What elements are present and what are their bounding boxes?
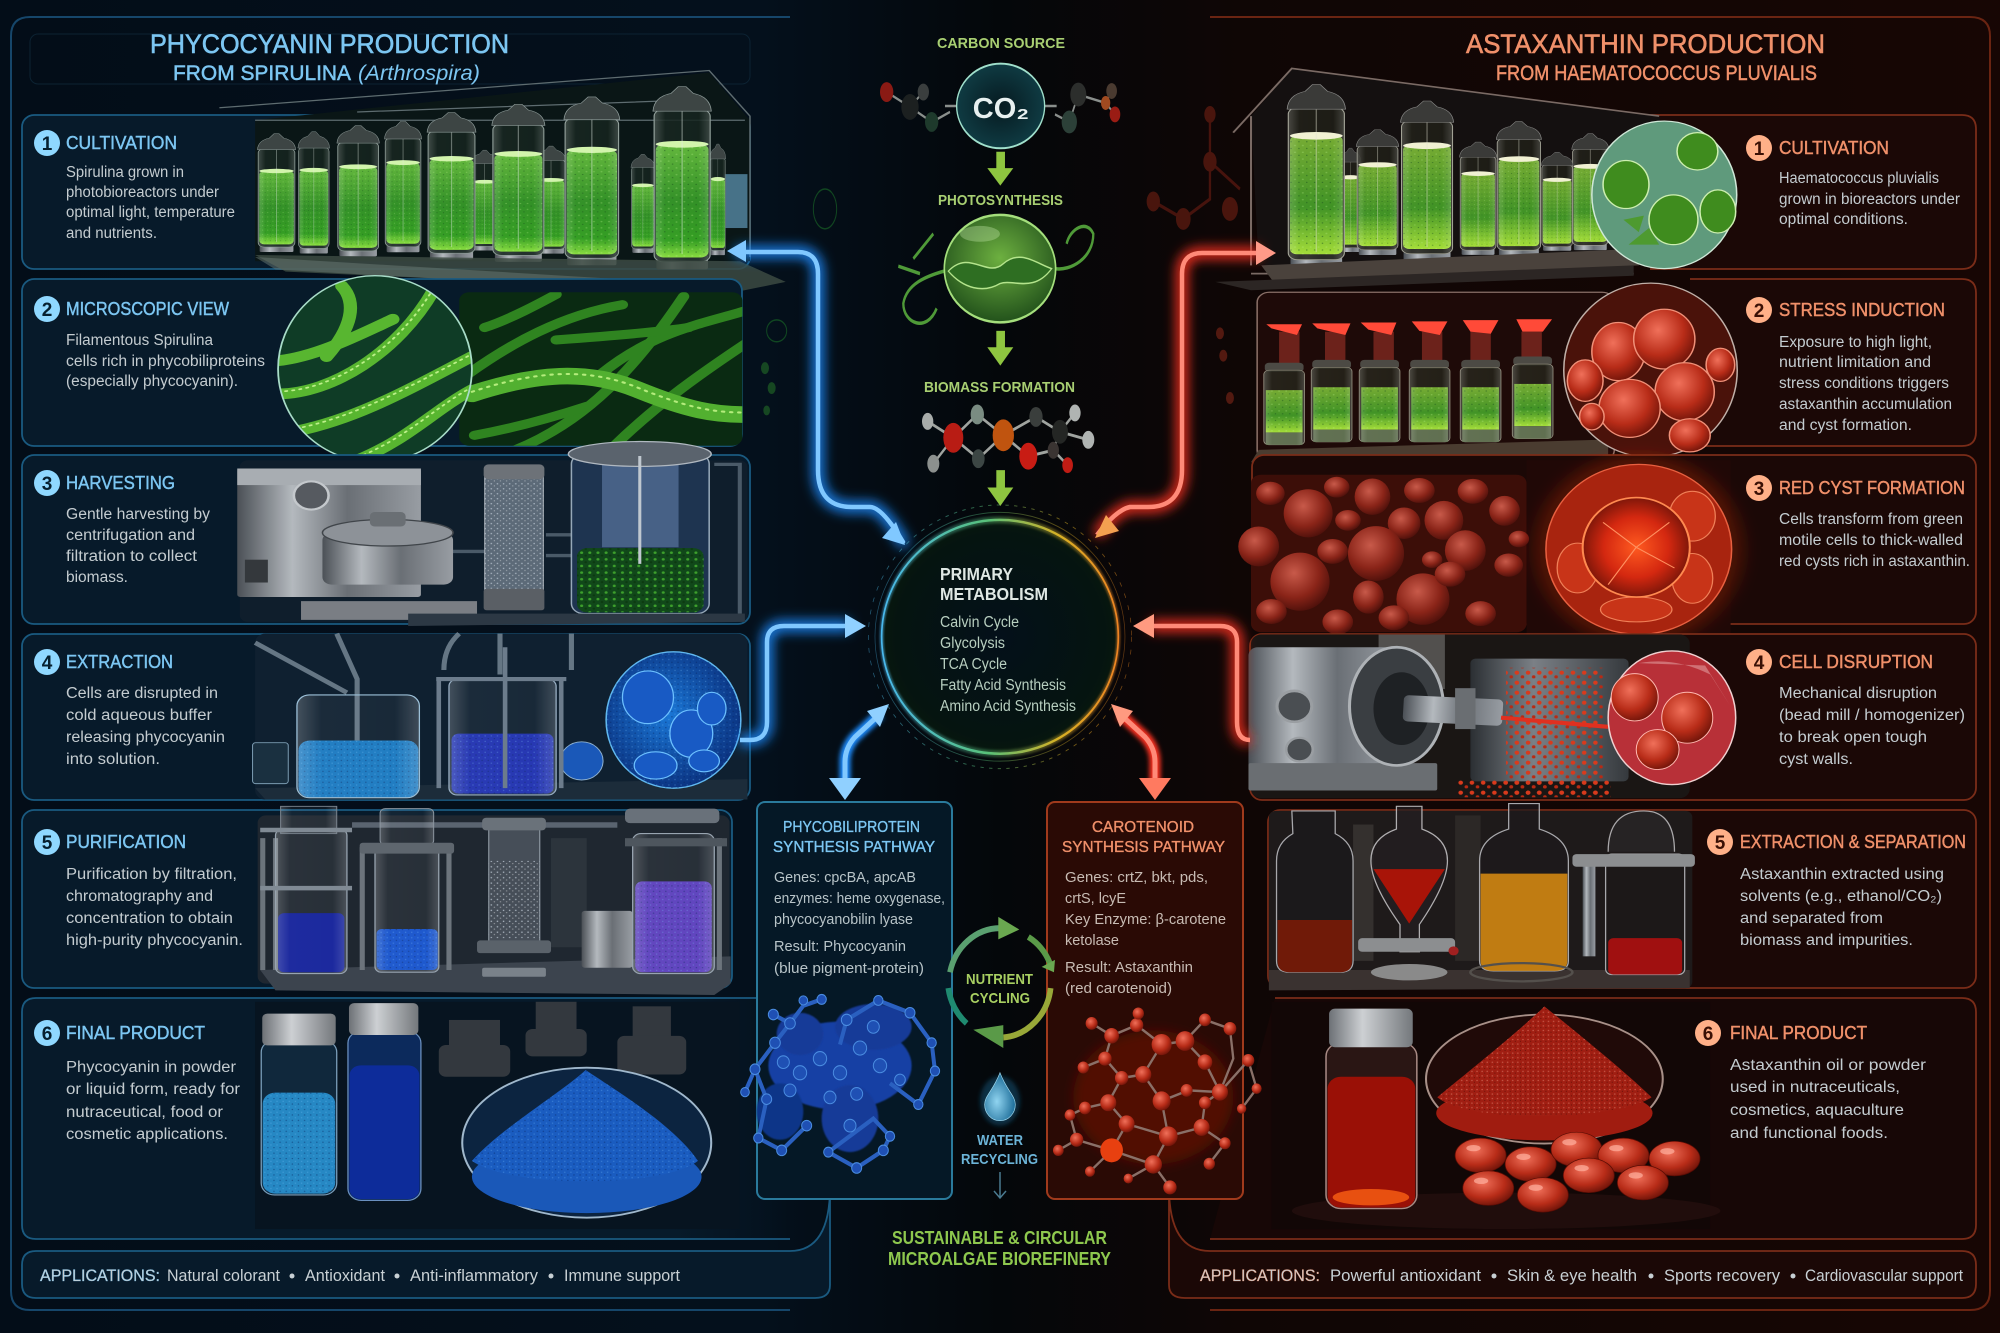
step body: Cells transform from green — [1779, 511, 1963, 528]
panel: phycocyanin applications: Antioxidant — [305, 1267, 385, 1285]
list: metabolism items — [940, 614, 1076, 715]
heading: phycocyanin title: PHYCOCYANIN PRODUCTION — [150, 29, 509, 59]
step body: Cells are disrupted in — [66, 685, 218, 702]
panel: phycocyanin applications: Anti-inflammatory — [410, 1267, 539, 1285]
panel: astaxanthin step 3 red cyst formation — [1238, 454, 1976, 645]
heading: phycocyanin title: (Arthrospira) — [358, 62, 480, 85]
step body — [66, 685, 225, 768]
step body — [1779, 334, 1952, 434]
arrow: water recycling down — [994, 1172, 1006, 1198]
step body: concentration to obtain — [66, 910, 233, 927]
body — [774, 870, 945, 977]
heading: astaxanthin title: FROM HAEMATOCOCCUS PLUVIALIS — [1496, 62, 1817, 85]
panel: astaxanthin applications: APPLICATIONS: — [1200, 1267, 1320, 1285]
step body: optimal conditions. — [1779, 211, 1908, 228]
list: metabolism items: TCA Cycle — [940, 656, 1007, 673]
image: vials and powder dish — [255, 1002, 740, 1229]
step body: Astaxanthin oil or powder — [1730, 1057, 1926, 1074]
step heading: EXTRACTION — [66, 652, 173, 672]
panel: astaxanthin step 4 cell disruption — [1248, 634, 1976, 800]
step badge 1 — [1746, 135, 1772, 161]
step body: nutraceutical, food or — [66, 1104, 223, 1121]
text: nutrient cycling — [966, 971, 1033, 1007]
step heading: FINAL PRODUCT — [1730, 1023, 1867, 1043]
step badge 3 — [34, 470, 60, 496]
image: spirulina filaments — [278, 276, 745, 462]
heading: phycocyanin title — [150, 29, 509, 85]
panel: phycocyanin step 5 purification — [22, 806, 732, 995]
step body: red cysts rich in astaxanthin. — [1779, 553, 1970, 570]
panel: astaxanthin applications: Skin & eye health — [1507, 1267, 1637, 1285]
step body: Filamentous Spirulina — [66, 332, 213, 349]
step body — [66, 1059, 240, 1143]
arrow: red pipe to cell disruption — [1133, 614, 1250, 740]
step body — [1779, 170, 1960, 228]
step body: into solution. — [66, 751, 160, 768]
step body: motile cells to thick-walled — [1779, 532, 1963, 549]
panel: phycocyanin step 6 final product — [22, 998, 790, 1239]
step body — [1730, 1057, 1926, 1142]
step heading: STRESS INDUCTION — [1779, 300, 1945, 320]
step badge 2 — [1746, 297, 1772, 323]
heading: phycocyanin title: FROM SPIRULINA — [173, 62, 351, 85]
image: beakers and cell sphere — [253, 634, 747, 800]
step body: Haematococcus pluvialis — [1779, 170, 1939, 187]
icon: red carotenoid molecule — [1053, 1007, 1262, 1194]
text: carbon source label: CARBON SOURCE — [937, 35, 1065, 52]
step body: Phycocyanin in powder — [66, 1059, 236, 1076]
step badge 2: 2 — [1754, 301, 1764, 322]
heading — [1062, 819, 1225, 856]
step body — [1740, 866, 1944, 949]
icon: CO2 bubble with molecules: CO₂ — [973, 93, 1029, 125]
image: bead mill and cell lens — [1248, 635, 1736, 798]
list: metabolism items: Fatty Acid Synthesis — [940, 677, 1066, 694]
step heading: CULTIVATION — [66, 133, 177, 153]
step badge 5: 5 — [42, 833, 53, 854]
body: ketolase — [1065, 933, 1119, 949]
panel: astaxanthin applications: Powerful antioxidant — [1330, 1267, 1481, 1285]
step body: to break open tough — [1779, 729, 1927, 746]
heading: SYNTHESIS PATHWAY — [1062, 839, 1225, 856]
step body: and cyst formation. — [1779, 417, 1912, 434]
image: red lamps and jars with cell lens — [1251, 283, 1737, 462]
heading: astaxanthin title — [1466, 29, 1825, 85]
step body: photobioreactors under — [66, 184, 219, 201]
step body: astaxanthin accumulation — [1779, 396, 1952, 413]
text: biomass formation label: BIOMASS FORMATION — [924, 379, 1075, 396]
list: metabolism items: Calvin Cycle — [940, 614, 1019, 631]
image: solvent flasks — [1269, 804, 1695, 990]
step body: releasing phycocyanin — [66, 729, 225, 746]
step body: biomass. — [66, 569, 128, 586]
panel: phycobiliprotein pathway — [741, 802, 952, 1199]
panel: primary metabolism circle — [868, 505, 1132, 769]
image: centrifuge and vessel — [237, 442, 747, 626]
list: metabolism items: Amino Acid Synthesis — [940, 698, 1076, 715]
text: nutrient cycling: CYCLING — [970, 990, 1030, 1007]
heading: PHYCOBILIPROTEIN — [783, 819, 920, 836]
step badge 6 — [34, 1020, 60, 1046]
panel: astaxanthin step 1 cultivation — [1215, 68, 1976, 290]
heading: CAROTENOID — [1092, 819, 1194, 836]
panel: phycocyanin step 3 harvesting — [22, 442, 750, 626]
text: sustainable biorefinery: SUSTAINABLE & CIRCULAR — [892, 1228, 1107, 1248]
step body: used in nutraceuticals, — [1730, 1079, 1900, 1096]
panel: phycocyanin step 4 extraction — [22, 634, 750, 800]
arrow: blue pipe to cultivation — [727, 240, 905, 545]
step body: Exposure to high light, — [1779, 334, 1932, 351]
heading: astaxanthin title: ASTAXANTHIN PRODUCTION — [1466, 29, 1825, 59]
step badge 1: 1 — [1754, 139, 1765, 160]
icon: water drop — [980, 1073, 1020, 1126]
step body: cyst walls. — [1779, 751, 1853, 768]
panel: phycocyanin step 1 cultivation — [22, 70, 786, 295]
text: sustainable biorefinery — [888, 1228, 1111, 1269]
text: sustainable biorefinery: MICROALGAE BIOREFINERY — [888, 1249, 1111, 1269]
step body: chromatography and — [66, 888, 213, 905]
decorative faint molecules — [761, 106, 1240, 415]
panel: phycocyanin applications — [22, 1187, 830, 1298]
arrow: red pipe to cultivation — [1095, 241, 1276, 538]
arrow: red double pipe to carotenoid pathway — [1111, 704, 1171, 800]
icon: biomass molecule — [922, 404, 1094, 473]
body — [1065, 870, 1226, 997]
image: green bioreactors and cell lens — [1215, 68, 1737, 290]
step body: high-purity phycocyanin. — [66, 932, 243, 949]
step body: (bead mill / homogenizer) — [1779, 707, 1965, 724]
image: red cysts — [1238, 454, 1743, 645]
body: crtS, lcyE — [1065, 891, 1126, 907]
body: (blue pigment-protein) — [774, 961, 924, 977]
step badge 3: 3 — [1754, 479, 1764, 500]
panel: astaxanthin frame — [1210, 17, 1990, 1310]
step body: cells rich in phycobiliproteins — [66, 353, 265, 370]
step badge 5 — [1707, 829, 1733, 855]
step body — [66, 332, 265, 390]
step badge 1: 1 — [42, 134, 53, 155]
step badge 3 — [1746, 475, 1772, 501]
icon: CO2 bubble with molecules — [880, 64, 1120, 148]
step badge 4: 4 — [1754, 653, 1765, 674]
panel: phycocyanin step 2 microscopic view — [22, 276, 745, 462]
text: nutrient cycling: NUTRIENT — [966, 971, 1033, 988]
step body: stress conditions triggers — [1779, 375, 1949, 392]
panel: astaxanthin applications — [1169, 1187, 1976, 1298]
step body: cosmetics, aquaculture — [1730, 1102, 1904, 1119]
step body: solvents (e.g., ethanol/CO₂) — [1740, 888, 1942, 905]
step body: centrifugation and — [66, 527, 195, 544]
step body: and nutrients. — [66, 225, 157, 242]
step body: (especially phycocyanin). — [66, 373, 238, 390]
body: Genes: cpcBA, apcAB — [774, 870, 916, 886]
body: (red carotenoid) — [1065, 981, 1172, 997]
step badge 6: 6 — [42, 1024, 52, 1045]
step heading: HARVESTING — [66, 473, 175, 493]
step heading: CULTIVATION — [1779, 138, 1889, 158]
step body: grown in bioreactors under — [1779, 191, 1960, 208]
body: phycocyanobilin lyase — [774, 912, 913, 928]
step body: cosmetic applications. — [66, 1126, 228, 1143]
panel: astaxanthin step 2 stress induction — [1251, 279, 1976, 462]
heading: primary metabolism — [940, 564, 1048, 604]
step body: filtration to collect — [66, 548, 198, 565]
step badge 1 — [34, 130, 60, 156]
icon: nutrient cycling arrows — [948, 917, 1055, 1048]
arrow: blue double pipe to phycobiliprotein pathway — [829, 704, 889, 800]
text: water recycling: WATER — [977, 1132, 1023, 1149]
step body — [1779, 511, 1970, 570]
heading: SYNTHESIS PATHWAY — [773, 839, 935, 856]
step badge 2: 2 — [42, 300, 52, 321]
step heading: CELL DISRUPTION — [1779, 652, 1933, 672]
list: metabolism items: Glycolysis — [940, 635, 1005, 652]
step body: and separated from — [1740, 910, 1883, 927]
body: enzymes: heme oxygenase, — [774, 891, 945, 907]
body: Result: Astaxanthin — [1065, 960, 1193, 976]
icon: blue protein molecule — [741, 994, 940, 1173]
panel: phycocyanin applications: Immune support — [564, 1267, 680, 1285]
step badge 4: 4 — [42, 653, 53, 674]
step badge 5 — [34, 829, 60, 855]
step heading: RED CYST FORMATION — [1779, 478, 1965, 498]
image: purification columns — [258, 806, 731, 995]
step badge 4 — [34, 649, 60, 675]
heading: primary metabolism: METABOLISM — [940, 584, 1048, 604]
step body — [1779, 685, 1965, 768]
panel: phycocyanin applications: APPLICATIONS: — [40, 1267, 160, 1285]
step badge 4 — [1746, 649, 1772, 675]
text: water recycling — [961, 1132, 1038, 1168]
panel: phycocyanin applications: Natural colorant — [167, 1267, 280, 1285]
icon: photosynthesis orb — [898, 215, 1093, 323]
image: green photobioreactors — [219, 70, 786, 295]
step body: optimal light, temperature — [66, 204, 235, 221]
arrow: photosynthesis to biomass — [987, 331, 1013, 366]
panel: astaxanthin applications: Sports recovery — [1664, 1267, 1781, 1285]
arrow: biomass to primary metabolism — [987, 470, 1013, 506]
step body: nutrient limitation and — [1779, 354, 1931, 371]
step heading: FINAL PRODUCT — [66, 1023, 205, 1043]
arrow: blue pipe to extraction — [740, 614, 866, 740]
step body — [66, 506, 210, 586]
text: photosynthesis label: PHOTOSYNTHESIS — [938, 192, 1063, 209]
heading: primary metabolism: PRIMARY — [940, 564, 1013, 584]
body: Key Enzyme: β-carotene — [1065, 912, 1226, 928]
step body: and functional foods. — [1730, 1125, 1888, 1142]
image: vial, red powder dish, capsules — [1271, 1002, 1720, 1229]
step body — [66, 164, 235, 242]
text: water recycling: RECYCLING — [961, 1151, 1038, 1168]
step badge 6 — [1695, 1020, 1721, 1046]
step heading: PURIFICATION — [66, 832, 186, 852]
step heading: MICROSCOPIC VIEW — [66, 299, 229, 319]
body: Genes: crtZ, bkt, pds, — [1065, 870, 1208, 886]
step badge 2 — [34, 296, 60, 322]
step body: or liquid form, ready for — [66, 1081, 240, 1098]
step body: biomass and impurities. — [1740, 932, 1913, 949]
step body: Spirulina grown in — [66, 164, 184, 181]
panel: carotenoid pathway — [1047, 802, 1262, 1199]
panel: astaxanthin step 5 extraction and separation — [1268, 804, 1976, 990]
panel: phycocyanin frame — [11, 17, 790, 1310]
arrow: CO2 to photosynthesis — [987, 152, 1013, 186]
body: Result: Phycocyanin — [774, 939, 906, 955]
step body — [66, 866, 243, 949]
panel: astaxanthin applications: Cardiovascular support — [1805, 1267, 1963, 1285]
step body: cold aqueous buffer — [66, 707, 212, 724]
heading — [773, 819, 935, 856]
step body: Astaxanthin extracted using — [1740, 866, 1944, 883]
step badge 3: 3 — [42, 474, 52, 495]
step body: Purification by filtration, — [66, 866, 237, 883]
step body: Mechanical disruption — [1779, 685, 1937, 702]
step badge 5: 5 — [1715, 833, 1726, 854]
step heading: EXTRACTION & SEPARATION — [1740, 832, 1966, 852]
panel: astaxanthin step 6 final product — [1210, 998, 1976, 1239]
step body: Gentle harvesting by — [66, 506, 210, 523]
step badge 6: 6 — [1703, 1024, 1713, 1045]
